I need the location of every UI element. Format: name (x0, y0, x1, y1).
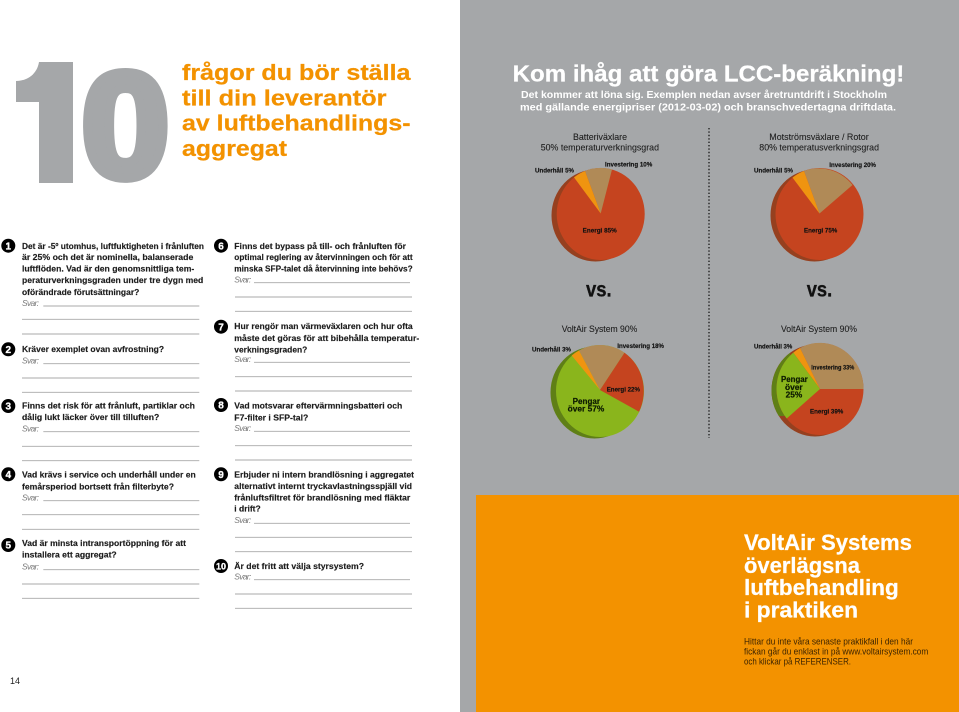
question 9: 9 (218, 470, 224, 481)
question 7 (214, 320, 420, 391)
question 8 (214, 398, 412, 460)
big number 10: 1 (6, 26, 103, 221)
question 10: 10 (216, 561, 226, 571)
pie panel: VoltAir System 2: Pengar (781, 375, 808, 384)
pie panel: Motströmsväxlare (754, 132, 879, 302)
heading: LCC: Det kommer att löna sig. Exemplen nedan avser åretruntdrift i Stockholm (521, 89, 887, 101)
question 7: Svar: (234, 354, 252, 364)
question 5: installera ett aggregat? (22, 549, 117, 559)
question 4: femårsperiod bortsett från filterbyte? (22, 481, 174, 491)
pie panel: Batteriväxlare: Investering 10% (605, 162, 653, 168)
pie panel: Batteriväxlare: 50% temperaturverkningsgrad (541, 142, 659, 152)
question 2: Kräver exemplet ovan avfrostning? (22, 344, 164, 354)
page number: 14 (10, 676, 20, 686)
question 7: Hur rengör man värmeväxlaren och hur ofta (234, 321, 413, 331)
question 2 (1, 342, 199, 392)
pie panel: VoltAir System 1: Investering 18% (617, 343, 664, 350)
question 5: Svar: (22, 562, 40, 572)
question 10 (214, 559, 412, 608)
panel: orange call to action: fickan går du enklast in på www.voltairsystem.com (744, 647, 929, 657)
panel: orange call to action: i praktiken (744, 598, 858, 623)
question 9: Svar: (234, 515, 252, 525)
question 3: Svar: (22, 424, 40, 434)
question 6: minska SFP-talet då återvinning inte behövs? (234, 264, 413, 274)
question 9: frånluftsfiltret för brandlösning med fläktar (234, 492, 411, 502)
question 10: Svar: (234, 572, 252, 582)
heading: LCC (513, 60, 904, 114)
pie panel: Batteriväxlare: Energi 85% (583, 227, 617, 234)
big number 10 (16, 62, 168, 183)
question 6 (214, 239, 413, 311)
pie panel: Batteriväxlare: Batteriväxlare (573, 132, 627, 142)
question 1: 1 (6, 241, 12, 252)
panel: orange call to action: Hittar du inte våra senaste praktikfall i den här (744, 636, 913, 646)
question 1: oförändrade förutsättningar? (22, 287, 139, 297)
pie panel: VoltAir System 1: Underhåll 3% (532, 346, 571, 353)
pie panel: VoltAir System 2: Underhåll 3% (754, 343, 793, 350)
title: till din leverantör (182, 85, 387, 110)
heading: LCC: med gällande energipriser (2012-03-02) och branschvedertagna driftdata. (520, 103, 896, 114)
question 1 (1, 239, 204, 334)
question 4: Vad krävs i service och underhåll under en (22, 470, 196, 480)
title: aggregat (182, 136, 288, 161)
heading: LCC: Kom ihåg att göra LCC-beräkning! (513, 60, 904, 86)
panel: orange call to action: överlägsna (744, 553, 860, 578)
question 1: luftflöden. Vad är den genomsnittliga tem- (22, 264, 195, 274)
question 8: 8 (218, 401, 224, 412)
question 7: 7 (218, 322, 224, 333)
question 6: 6 (218, 241, 224, 252)
panel: grey right background (460, 0, 959, 712)
title: av luftbehandlings- (182, 111, 410, 136)
panel: orange call to action: luftbehandling (744, 575, 899, 600)
pie panel: VoltAir System 2: över (785, 383, 803, 392)
question 6: optimal reglering av återvinningen och för att (234, 252, 413, 262)
title (182, 60, 411, 161)
pie panel: VoltAir System 2 (754, 324, 864, 436)
question 6: Svar: (234, 274, 252, 284)
pie panel: Motströmsväxlare: Underhåll 5% (754, 167, 793, 174)
question 8: Vad motsvarar eftervärmningsbatteri och (234, 401, 402, 411)
pie panel: Motströmsväxlare: 80% temperatusverkningsgrad (759, 142, 879, 152)
pie panel: VoltAir System 2: VoltAir System 90% (781, 324, 857, 334)
question 9: i drift? (234, 504, 261, 514)
pie panel: Batteriväxlare (535, 132, 659, 302)
question 2: Svar: (22, 355, 40, 365)
question 3 (1, 399, 199, 461)
pie panel: VoltAir System 2: Investering 33% (811, 365, 855, 372)
question 3: Finns det risk för att frånluft, partiklar och (22, 401, 195, 411)
question 1: peraturverkningsgraden under tre dygn med (22, 275, 203, 285)
question 5: 5 (6, 541, 12, 552)
panel: orange call to action: och klickar på REFERENSER. (744, 657, 851, 667)
pie panel: Motströmsväxlare: Investering 20% (829, 162, 876, 169)
question 3: 3 (6, 402, 12, 413)
question 9: Erbjuder ni intern brandlösning i aggregatet (234, 470, 414, 480)
question 1: är 25% och det är nominella, balanserade (22, 252, 194, 262)
question 6: Finns det bypass på till- och frånluften för (234, 241, 407, 251)
big number 10: 0 (82, 42, 169, 209)
question 1: Det är -5º utomhus, luftfuktigheten i frånluften (22, 241, 204, 251)
pie panel: VoltAir System 2: 25% (786, 390, 802, 399)
pie panel: VoltAir System 1: över 57% (568, 404, 604, 413)
pie panel: VoltAir System 1 (532, 324, 664, 438)
question 7: verkningsgraden? (234, 344, 307, 354)
question 4 (1, 467, 199, 529)
dotted vertical separator (708, 128, 710, 438)
question 8: F7-filter i SFP-tal? (234, 413, 308, 423)
pie panel: VoltAir System 1: Pengar (573, 397, 600, 406)
title: frågor du bör ställa (182, 60, 411, 85)
pie panel: VoltAir System 2: Energi 39% (810, 408, 844, 415)
panel: orange call to action: VoltAir Systems (744, 530, 912, 555)
question 9 (214, 467, 414, 552)
question 2: 2 (6, 345, 12, 356)
question 7: måste det göras för att bibehålla temperatur- (234, 333, 420, 343)
pie panel: VoltAir System 1: Energi 22% (607, 387, 640, 394)
pie panel: Motströmsväxlare: Motströmsväxlare / Rotor (769, 132, 869, 142)
pie panel: VoltAir System 1: VoltAir System 90% (562, 324, 637, 334)
question 4: Svar: (22, 492, 40, 502)
question 9: alternativt internt tryckavlastningsspjäll vid (234, 481, 412, 491)
panel: orange call to action (476, 495, 959, 712)
question 4: 4 (6, 470, 12, 481)
pie panel: Batteriväxlare: Underhåll 5% (535, 167, 574, 174)
question 3: dålig lukt läcker över till tilluften? (22, 412, 159, 422)
pie panel: Batteriväxlare: vs. (586, 279, 612, 302)
pie panel: Motströmsväxlare: vs. (807, 279, 832, 302)
question 5 (1, 538, 199, 598)
question 5: Vad är minsta intransportöppning för att (22, 538, 186, 548)
question 1: Svar: (22, 298, 40, 308)
question 8: Svar: (234, 423, 252, 433)
pie panel: Motströmsväxlare: Energi 75% (804, 227, 838, 234)
question 10: Är det fritt att välja styrsystem? (234, 561, 364, 571)
